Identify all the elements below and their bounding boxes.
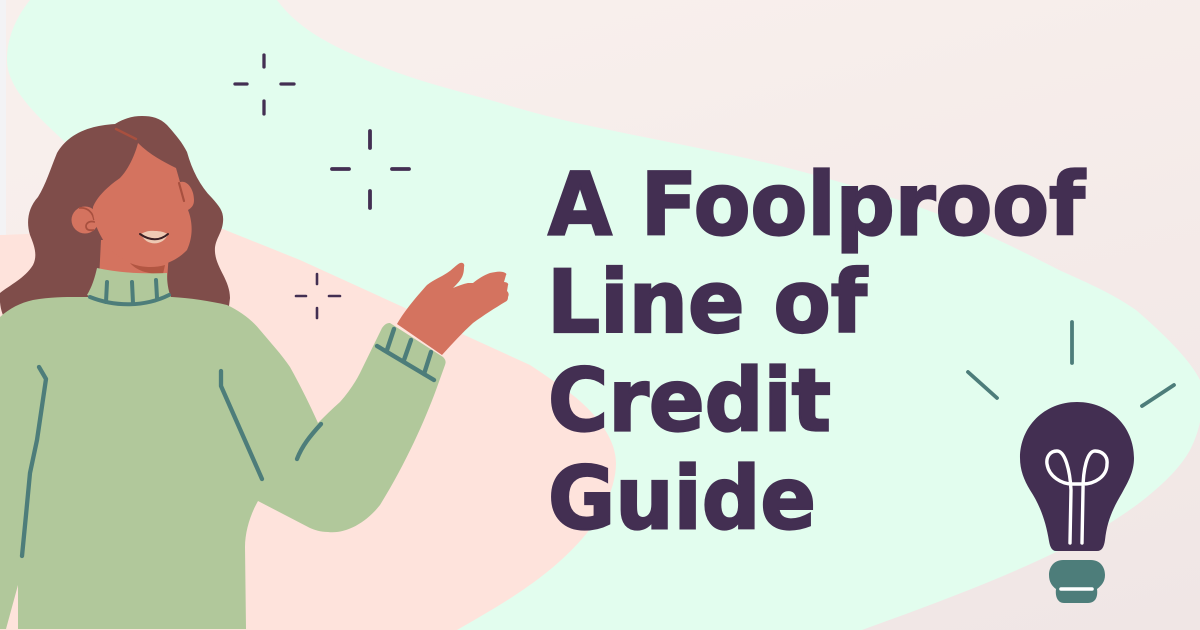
peach blob (0, 228, 616, 630)
cuff ribbing (377, 329, 434, 380)
collar ribbing (90, 280, 169, 304)
bulb base (1049, 560, 1105, 603)
bulb filament (1047, 451, 1107, 543)
hair strand on face (179, 183, 184, 201)
sweater body (0, 297, 446, 629)
bulb glass (1020, 402, 1134, 551)
bulb rays (968, 322, 1174, 406)
sparkle: top (235, 55, 294, 114)
sparkle: small (296, 274, 340, 318)
face (93, 143, 194, 267)
icon: light bulb (968, 322, 1174, 603)
title: Line of (547, 253, 868, 353)
hair clip (116, 129, 136, 139)
woman illustration (0, 116, 509, 629)
neck (99, 240, 170, 280)
neck shadow (130, 263, 165, 274)
sparkle: middle (332, 131, 409, 208)
turtleneck (87, 268, 171, 305)
sweater fold lines (22, 367, 321, 556)
title: A Foolproof (548, 156, 1086, 256)
hair (0, 116, 230, 322)
title: Credit (548, 352, 831, 452)
bulb base highlight (1061, 587, 1092, 591)
title (547, 156, 1086, 550)
mouth (140, 231, 168, 243)
hand (397, 263, 509, 355)
title: Guide (548, 450, 816, 550)
ear (72, 206, 98, 234)
